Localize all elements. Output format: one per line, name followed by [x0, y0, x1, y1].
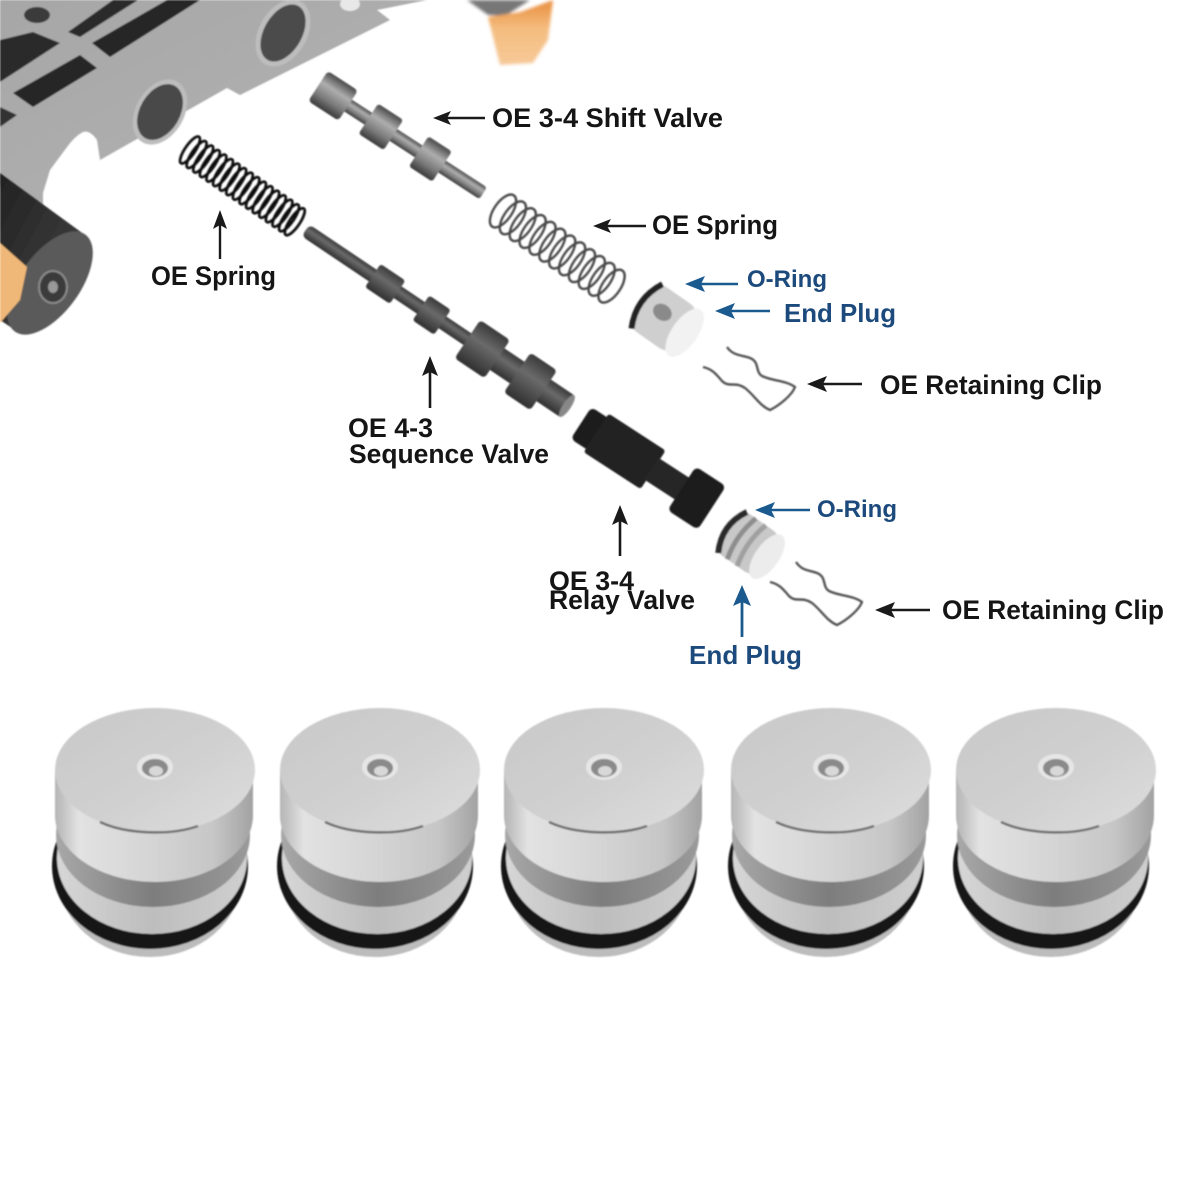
- end plug product photo 4: [728, 708, 931, 957]
- arrow: lower End Plug: [733, 585, 751, 637]
- end plug upper: [624, 279, 711, 363]
- arrow: shift valve: [433, 111, 485, 125]
- valve body casting: [0, 0, 427, 205]
- end plug product photo 5: [953, 708, 1156, 957]
- label: OE 3-4 Relay Valve: OE 3-4: [549, 566, 634, 596]
- end plug lower: [711, 507, 792, 585]
- arrow: left spring: [213, 210, 227, 259]
- label: OE Spring left: OE Spring: [151, 261, 276, 291]
- label: upper OE Retaining Clip: OE Retaining Clip: [880, 370, 1102, 400]
- label: OE 4-3 Sequence Valve: [348, 413, 549, 469]
- label: OE 3-4 Relay Valve: Relay Valve: [549, 585, 695, 615]
- arrow: sequence valve: [422, 356, 438, 408]
- solenoid with orange connector: [0, 173, 110, 349]
- arrow: right spring: [593, 219, 646, 233]
- end plug product photo 3: [501, 708, 704, 957]
- label: lower OE Retaining Clip: OE Retaining Clip: [942, 595, 1164, 625]
- arrow: upper O-ring: [685, 276, 738, 292]
- label: OE 3-4 Relay Valve: [549, 566, 695, 615]
- end plug product photo 2: [277, 708, 480, 957]
- retaining clip upper: [703, 347, 795, 410]
- end plug product photo 1: [52, 708, 255, 957]
- label: OE 4-3 Sequence Valve: OE 4-3: [348, 413, 433, 443]
- OE 3-4 shift valve: [308, 71, 493, 208]
- OE spring left: [177, 134, 308, 238]
- label: OE 3-4 Shift Valve: OE 3-4 Shift Valve: [492, 103, 723, 133]
- OE spring right: [485, 190, 630, 307]
- orange connector top: [467, 0, 553, 65]
- OE 3-4 relay valve: [567, 401, 726, 530]
- OE 4-3 sequence valve: [292, 210, 584, 428]
- arrow: upper End Plug: [715, 303, 770, 319]
- label: lower O-Ring: O-Ring: [817, 496, 897, 523]
- label: upper O-Ring: O-Ring: [747, 266, 827, 293]
- arrow: lower clip: [875, 602, 930, 618]
- arrow: upper clip: [807, 376, 862, 392]
- label: upper End Plug: End Plug: [784, 298, 896, 328]
- retaining clip lower: [770, 562, 862, 625]
- label: OE Spring right: OE Spring: [652, 210, 778, 240]
- arrow: lower O-ring: [755, 502, 810, 518]
- label: lower End Plug: End Plug: [689, 640, 802, 670]
- label: OE 4-3 Sequence Valve: Sequence Valve: [349, 439, 549, 469]
- arrow: relay valve: [612, 505, 628, 556]
